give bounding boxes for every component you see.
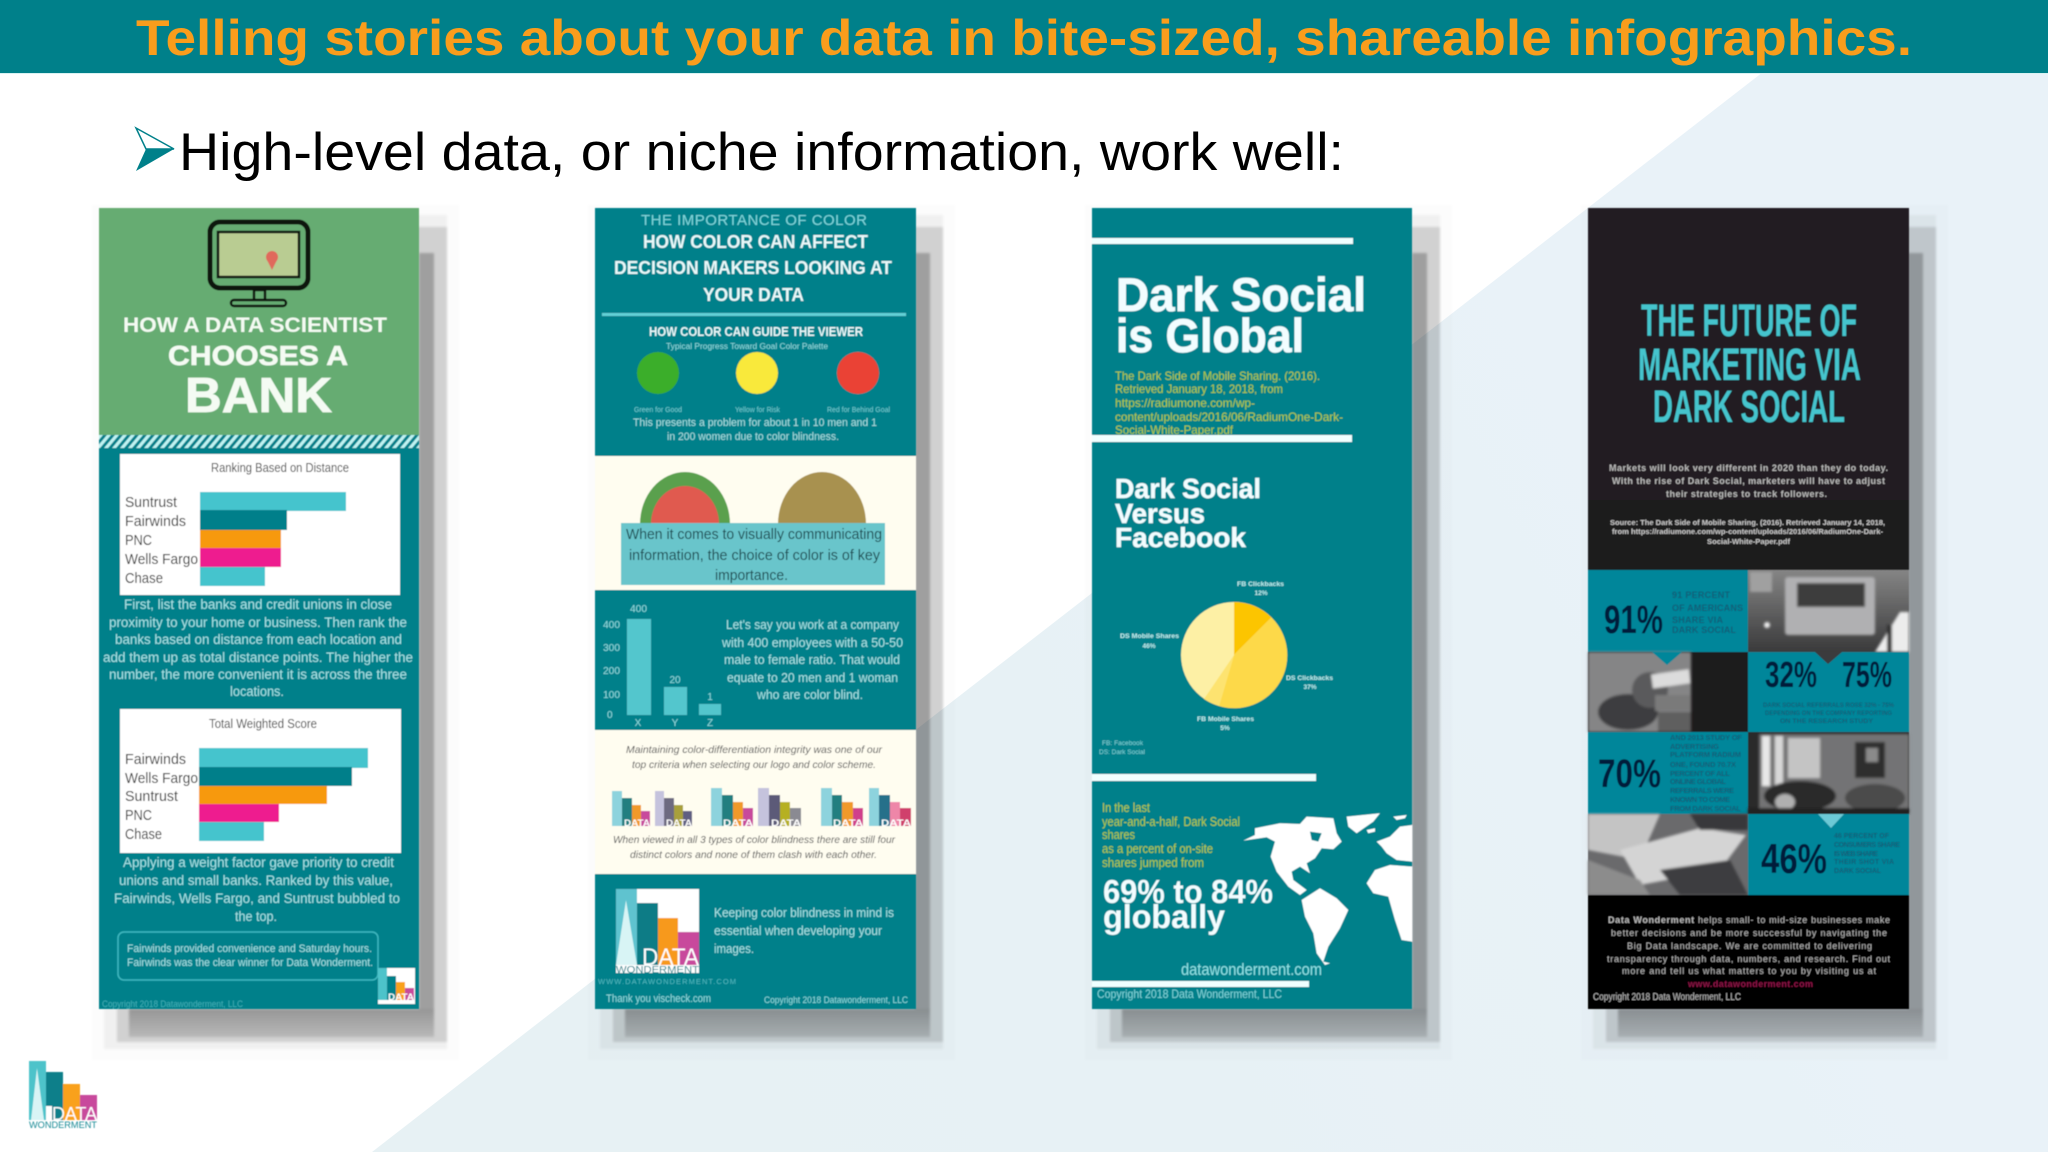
panel heading: DECISION MAKERS LOOKING AT: [614, 257, 893, 278]
text block: keeping color blindness in mind: essential when developing your: [714, 924, 882, 938]
icon: Data Wonderment logo: [616, 889, 699, 976]
pie chart: shares by channel: FB: Facebook: [1102, 740, 1144, 747]
panel: the future of marketing via dark social: [1588, 208, 1909, 1009]
bar chart: ranking based on distance: Ranking Based on Distance: [211, 461, 349, 475]
panel: the importance of color: [595, 208, 916, 1009]
panel heading: THE FUTURE OF: [1641, 295, 1857, 346]
bar chart: total weighted score: PNC: [125, 807, 152, 824]
section: logo color scheme: distinct colors and none of them clash with each other.: [630, 849, 877, 861]
icon: logo simulation 2: DATA: [666, 818, 693, 828]
text block: source: Social-White-Paper.pdf: [1707, 537, 1790, 546]
panel heading: [1116, 268, 1366, 362]
stat tile: 70%: AND 2013 STUDY OF: [1670, 733, 1742, 742]
chart: traffic light color circles: Red for Behind Goal: [827, 407, 890, 414]
text block: source: from https://radiumone.com/wp-content/uploads/2016/06/RadiumOne-Dark-: [1612, 527, 1884, 536]
text block: company example: with 400 employees with a 50-50: [721, 636, 903, 650]
photo: laptop: [1748, 570, 1909, 652]
stat tile: 46%: DARK SOCIAL: [1834, 868, 1882, 875]
text block: ranking explanation: add them up as total distance points. The higher the: [103, 650, 413, 665]
text block: intro: their strategies to track followers.: [1666, 489, 1827, 499]
icon: logo simulation 6: [869, 788, 912, 828]
bar chart: color blind employees: 400: [603, 620, 620, 631]
stat tile: 46%: 46 PERCENT OF: [1834, 833, 1890, 840]
text block: source: content/uploads/2016/06/RadiumOne-Dark-: [1115, 410, 1343, 424]
callout: Fairwinds winner: Fairwinds provided convenience and Saturday hours.: [127, 943, 372, 955]
text block: source: [1610, 518, 1885, 546]
logo: Data Wonderment: WONDERMENT: [29, 1120, 97, 1131]
website link: datawonderment.com: [1181, 960, 1322, 979]
stat tile: 32% and 75%: DARK SOCIAL REFERRALS ROSE 32% - 75%: [1763, 702, 1894, 709]
subheading: dark social versus facebook: [1115, 473, 1261, 553]
text block: ranking explanation: number, the more convenient it is across the three: [109, 667, 407, 682]
pie chart: shares by channel: 37%: [1303, 684, 1317, 691]
copyright: Copyright 2018 Datawonderment, LLC: [102, 999, 243, 1010]
bar chart: ranking based on distance: Fairwinds: [125, 513, 186, 530]
pie chart: shares by channel: DS Mobile Shares: [1120, 633, 1179, 640]
pie chart: shares by channel: 5%: [1220, 725, 1230, 732]
bar chart: total weighted score: Total Weighted Score: [209, 717, 317, 731]
bar chart: color blind employees: 100: [603, 690, 620, 701]
subheading: how color can guide the viewer: Typical Progress Toward Goal Color Palette: [666, 342, 829, 351]
pie chart: shares by channel: 12%: [1254, 590, 1268, 597]
text block: source: https://radiumone.com/wp-: [1115, 396, 1255, 410]
chart: dome comparison: [640, 472, 866, 524]
icon: logo simulation 2: [655, 791, 693, 828]
stat tile: 70%: ONLINE GLOBAL: [1670, 777, 1726, 786]
photo: hands on laptop: [1588, 814, 1748, 895]
text block: growth of dark social: shares jumped from: [1102, 855, 1204, 870]
section: logo color scheme: Maintaining color-differentiation integrity was one of our: [626, 744, 882, 756]
subheading: dark social versus facebook: Dark Social: [1115, 473, 1261, 504]
stat tile: 70%: ADVERTISING: [1670, 742, 1719, 751]
bar chart: ranking based on distance: Chase: [125, 570, 163, 587]
text block: growth of dark social: shares: [1102, 827, 1135, 842]
text block: ranking explanation: banks based on distance from each location and: [115, 632, 402, 647]
text block: intro: With the rise of Dark Social, marketers will have to adjust: [1612, 476, 1885, 486]
panel heading: HOW A DATA SCIENTIST: [123, 314, 387, 337]
bar chart: ranking based on distance: Suntrust: [125, 494, 178, 511]
footer: about Data Wonderment: www.datawonderment.com: [1687, 979, 1813, 989]
bar chart: color blind employees: 20: [669, 675, 681, 686]
panel heading: BANK: [185, 369, 332, 423]
stat tile: 70%: [1588, 732, 1748, 814]
panel heading: [1638, 295, 1861, 432]
panel heading: MARKETING VIA: [1638, 339, 1861, 390]
stat tile: 91%: SHARE VIA: [1672, 615, 1724, 625]
footer: about Data Wonderment: [1588, 895, 1909, 1009]
stat tile: 32% and 75%: ON THE RESEARCH STUDY: [1780, 718, 1874, 725]
callout: Fairwinds winner: [118, 932, 378, 980]
text block: weighted score explanation: the top.: [235, 909, 277, 924]
text block: source: Source: The Dark Side of Mobile Sharing. (2016). Retrieved January 14, 2018,: [1610, 518, 1885, 527]
footer: about Data Wonderment: Big Data landscape. We are committed to delivering: [1627, 941, 1872, 951]
bar chart: total weighted score: Chase: [125, 826, 162, 843]
photo: meeting room: [1748, 732, 1909, 814]
icon: logo simulation 3: DATA: [723, 818, 754, 828]
panel heading: [614, 212, 893, 305]
logo: Data Wonderment: [29, 1061, 97, 1131]
bar chart: total weighted score: Suntrust: [125, 788, 179, 805]
stat tile: 91%: 91 PERCENT: [1672, 590, 1730, 600]
title: Telling stories about your data in bite-sized, shareable infographics.: [136, 10, 1912, 66]
stat tile: 46%: [1748, 814, 1909, 895]
text block: source: Social-White-Paper.pdf: [1115, 423, 1234, 437]
footer: about Data Wonderment: more and tell us what matters to you by visiting us at: [1622, 966, 1876, 976]
bar chart: color blind employees: 0: [607, 710, 613, 721]
bar chart: color blind employees: X: [635, 718, 642, 729]
logo: Data Wonderment: DATA: [52, 1104, 97, 1124]
text block: color blindness problem: This presents a problem for about 1 in 10 men and 1: [633, 417, 877, 429]
stat tile: 70%: ONE, FOUND 70.7X: [1670, 760, 1736, 769]
stat tile: 91%: OF AMERICANS: [1672, 603, 1743, 613]
stat tile: 70%: FROM DARK SOCIAL: [1670, 804, 1741, 813]
icon: logo simulation 4: DATA: [771, 818, 802, 828]
text block: weighted score explanation: unions and small banks. Ranked by this value,: [119, 873, 393, 888]
stat tile: 46%: IS WEB SHARE: [1834, 851, 1878, 858]
stat tile: 91%: 91%: [1604, 598, 1663, 642]
bar chart: color blind employees: 300: [603, 643, 620, 654]
stat tile: 32% and 75%: 75%: [1842, 654, 1892, 695]
stat tile: 70%: KNOWN TO COME: [1670, 795, 1730, 804]
text block: ranking explanation: First, list the banks and credit unions in close: [124, 597, 392, 612]
bar chart: total weighted score: Fairwinds: [125, 751, 186, 768]
panel: dark social is global: [1092, 208, 1412, 1009]
icon: logo simulation 3: [711, 788, 754, 828]
section: key importance of color: information, the choice of color is of key: [629, 547, 880, 564]
panel heading: YOUR DATA: [703, 284, 804, 305]
text block: keeping color blindness in mind: Keeping color blindness in mind is: [714, 906, 894, 920]
text block: color blindness problem: [633, 417, 877, 443]
panel heading: [123, 314, 387, 423]
text block: company example: equate to 20 men and 1 woman: [727, 671, 898, 685]
text block: keeping color blindness in mind: [714, 906, 894, 956]
panel heading: HOW COLOR CAN AFFECT: [643, 231, 869, 252]
footer: about Data Wonderment: transparency through data, numbers, and research. Find out: [1607, 954, 1890, 964]
section: key importance of color: When it comes to visually communicating: [626, 526, 882, 543]
stat tile: 46%: THEIR SHOT VIA: [1834, 859, 1894, 866]
footer text: Copyright 2018 Datawonderment, LLC: [764, 995, 908, 1006]
text block: company example: Let's say you work at a company: [726, 618, 900, 632]
text block: growth of dark social: year-and-a-half, Dark Social: [1102, 814, 1240, 829]
text block: color blindness problem: in 200 women due to color blindness.: [667, 431, 839, 443]
footer text: Thank you vischeck.com: [606, 993, 711, 1005]
text block: weighted score explanation: Applying a weight factor gave priority to credit: [123, 855, 394, 870]
stat tile: 70%: REFERRALS WERE: [1670, 786, 1734, 795]
chart: traffic light color circles: Green for Good: [634, 407, 682, 414]
icon: logo simulation 5: [821, 788, 864, 828]
text block: intro: Markets will look very different in 2020 than they do today.: [1609, 463, 1888, 473]
text block: growth of dark social: In the last: [1102, 800, 1150, 815]
bar chart: total weighted score: [120, 709, 401, 853]
panel: how a data scientist chooses a bank: [99, 208, 419, 1010]
subheading with arrow bullet: [136, 123, 1344, 182]
footer: about Data Wonderment: Copyright 2018 Data Wonderment, LLC: [1593, 992, 1741, 1003]
stat tile: 70%: PERCENT OF ALL: [1670, 769, 1730, 778]
text block: company example: who are color blind.: [756, 688, 863, 702]
panel heading: DARK SOCIAL: [1653, 381, 1845, 432]
text block: weighted score explanation: Fairwinds, Wells Fargo, and Suntrust bubbled to: [114, 891, 400, 906]
icon: arrow bullet: [136, 128, 174, 171]
stat tile: 32% and 75%: DEPENDING ON THE COMPANY REPORTING: [1765, 710, 1892, 717]
icon: Data Wonderment logo: WONDERMENT: [616, 965, 699, 976]
pie chart: shares by channel: FB Mobile Shares: [1197, 716, 1254, 723]
pie chart: shares by channel: DS Clickbacks: [1286, 675, 1333, 682]
text block: source: Retrieved January 18, 2018, from: [1115, 382, 1283, 396]
stat tile: 32% and 75%: 32%: [1765, 654, 1817, 695]
footer text: WWW.DATAWONDERMENT.COM: [598, 977, 736, 986]
stat tile: 70%: PLATFORM RADIUM: [1670, 750, 1741, 759]
text block: growth of dark social: [1102, 800, 1240, 870]
big stat: [1103, 873, 1273, 935]
subheading: dark social versus facebook: Versus: [1115, 498, 1205, 529]
stat tile: 70%: 70%: [1598, 752, 1661, 796]
bar chart: color blind employees: Z: [707, 718, 713, 729]
bar chart: ranking based on distance: [120, 454, 400, 595]
icon: logo simulation 4: [758, 788, 802, 828]
text block: source: [1115, 369, 1343, 437]
bar chart: color blind employees: 1: [707, 692, 713, 703]
bar chart: total weighted score: Wells Fargo: [125, 770, 198, 787]
bar chart: ranking based on distance: Wells Fargo: [125, 551, 198, 568]
big stat: globally: [1103, 898, 1226, 935]
icon: logo normal vision: DATA: [624, 818, 651, 828]
photo: hand and card: [1588, 652, 1748, 732]
bar chart: color blind employees: 400: [630, 604, 647, 615]
footer text: [598, 977, 908, 1006]
pie chart: shares by channel: DS: Dark Social: [1099, 749, 1146, 756]
bar chart: ranking based on distance: PNC: [125, 532, 152, 549]
section: logo color scheme: [595, 730, 916, 874]
pie chart: shares by channel: FB Clickbacks: [1237, 581, 1284, 588]
footer: about Data Wonderment: Data Wonderment helps small- to mid-size businesses make: [1608, 915, 1890, 925]
icon: Data Wonderment logo: DATA: [642, 944, 699, 971]
icon: logo simulation 5: DATA: [833, 818, 864, 828]
chart: traffic light color circles: Yellow for Risk: [735, 407, 780, 414]
bar chart: color blind employees: [603, 604, 721, 729]
chart: traffic light color circles: [634, 352, 890, 414]
icon: small Data Wonderment logo: [378, 968, 415, 1004]
footer: about Data Wonderment: better decisions and be more successful by navigating the: [1611, 928, 1887, 938]
subheading: how color can guide the viewer: HOW COLOR CAN GUIDE THE VIEWER: [649, 325, 863, 339]
section: key importance of color: [595, 456, 916, 590]
panel heading: is Global: [1116, 309, 1304, 362]
subheading: dark social versus facebook: Facebook: [1115, 522, 1246, 553]
text block: weighted score explanation: [114, 855, 400, 924]
header banner: [0, 0, 2048, 74]
text block: ranking explanation: locations.: [230, 684, 284, 699]
text block: ranking explanation: proximity to your home or business. Then rank the: [109, 615, 407, 630]
text block: ranking explanation: [103, 597, 413, 699]
bar chart: color blind employees: Y: [672, 718, 679, 729]
pie chart: shares by channel: 46%: [1142, 643, 1156, 650]
big stat: 69% to 84%: [1103, 873, 1273, 910]
icon: world map: [1243, 813, 1412, 965]
callout: Fairwinds winner: Fairwinds was the clear winner for Data Wonderment.: [127, 957, 373, 969]
bar chart: color blind employees: 200: [603, 666, 620, 677]
section: logo color scheme: top criteria when selecting our logo and color scheme.: [632, 759, 876, 771]
subheading: how color can guide the viewer: [649, 325, 863, 351]
stat tile: 32% and 75%: [1748, 652, 1909, 732]
panel heading: Dark Social: [1116, 268, 1366, 321]
stat tile: 91%: DARK SOCIAL: [1672, 625, 1736, 635]
text block: company example: [721, 618, 903, 702]
stat tile: 46%: 46%: [1761, 835, 1827, 882]
icon: small Data Wonderment logo: DATA: [388, 992, 415, 1002]
panel heading: THE IMPORTANCE OF COLOR: [641, 212, 867, 229]
icon: logo simulation 6: DATA: [881, 818, 912, 828]
icon: logo normal vision: [612, 791, 651, 828]
section: key importance of color: importance.: [715, 567, 788, 584]
section: logo color scheme: When viewed in all 3 types of color blindness there are still four: [613, 834, 895, 846]
text block: growth of dark social: as a percent of on-site: [1102, 841, 1213, 856]
text block: keeping color blindness in mind: images.: [714, 942, 754, 956]
copyright: Copyright 2018 Data Wonderment, LLC: [1097, 987, 1282, 1001]
icon: monitor with map pin: [210, 222, 308, 306]
subheading text: High-level data, or niche information, work well:: [179, 123, 1344, 182]
stat tile: 91%: [1588, 570, 1748, 652]
stat tile: 46%: CONSUMERS SHARE: [1834, 842, 1900, 849]
text block: company example: male to female ratio. That would: [724, 653, 900, 667]
panel heading: CHOOSES A: [168, 340, 348, 371]
text block: intro: [1609, 463, 1888, 499]
pie chart: shares by channel: [1099, 581, 1333, 756]
text block: source: The Dark Side of Mobile Sharing. (2016).: [1115, 369, 1320, 383]
